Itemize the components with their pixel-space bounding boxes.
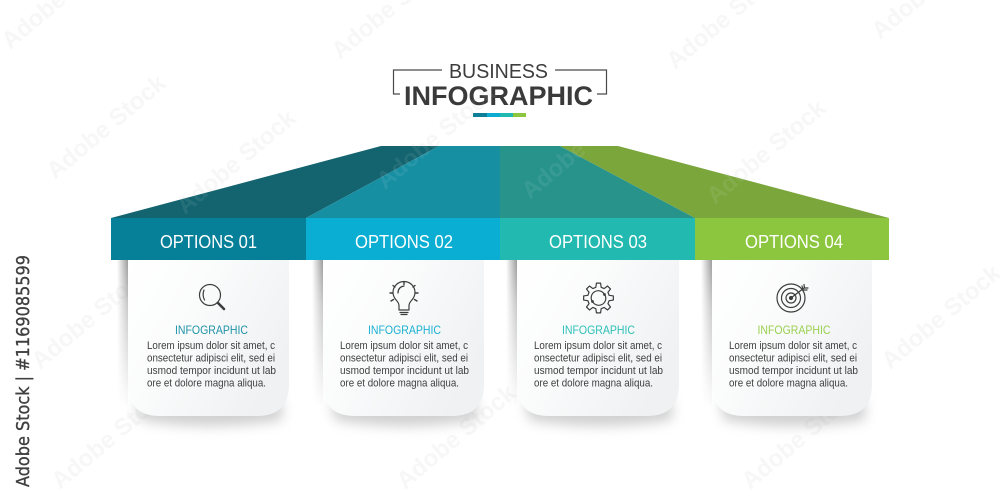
- title: [394, 61, 606, 117]
- roof watermark overlay: Adobe Stock: [702, 94, 832, 210]
- option 3 header: OPTIONS 03: [549, 232, 647, 252]
- left shade: [313, 260, 323, 393]
- watermark pattern: Adobe Stock: [172, 104, 302, 220]
- option 3 header: [500, 218, 695, 260]
- roof segment 4: [560, 146, 889, 218]
- card text: Lorem ipsum dolor sit amet, c: [534, 340, 662, 352]
- panel: option 4 card: [701, 260, 872, 426]
- stock credit vertical text: Adobe Stock | #1169085599: [13, 255, 34, 487]
- card text: Lorem ipsum dolor sit amet, c: [729, 340, 857, 352]
- card text: usmod tempor incidunt ut lab: [147, 365, 276, 377]
- card text: onsectetur adipisci elit, sed ei: [729, 352, 857, 364]
- watermark pattern: Adobe Stock: [702, 94, 832, 210]
- option 2 header: [306, 218, 500, 260]
- card text: ore et dolore magna aliqua.: [147, 378, 266, 390]
- roof watermark overlay: [172, 79, 832, 220]
- card shadow: [525, 400, 672, 426]
- card text: [729, 340, 858, 390]
- left shade: [702, 260, 712, 393]
- watermark pattern: Adobe Stock: [42, 69, 172, 185]
- watermark pattern: Adobe Stock: [27, 259, 157, 375]
- title colour bar: [473, 113, 526, 117]
- card text: Lorem ipsum dolor sit amet, c: [340, 340, 468, 352]
- watermark pattern: Adobe Stock: [392, 379, 522, 495]
- card text: onsectetur adipisci elit, sed ei: [534, 352, 662, 364]
- card body: [712, 260, 872, 416]
- roof watermark overlay: Adobe Stock: [517, 89, 647, 205]
- watermark pattern: Adobe Stock: [737, 379, 867, 495]
- roof watermark overlay: Adobe Stock: [172, 104, 302, 220]
- option 4 header: [695, 218, 889, 260]
- card text: usmod tempor incidunt ut lab: [729, 365, 858, 377]
- card heading: INFOGRAPHIC: [562, 323, 635, 337]
- card heading: INFOGRAPHIC: [175, 323, 248, 337]
- left shade: [118, 260, 128, 393]
- card shadow: [720, 400, 865, 426]
- roof watermark overlay: Adobe Stock: [372, 79, 502, 195]
- icon: magnifier: [200, 284, 224, 309]
- title line 1: BUSINESS: [449, 61, 548, 83]
- option 4 header: OPTIONS 04: [745, 232, 843, 252]
- card shadow: [331, 400, 477, 426]
- icon: target: [777, 284, 808, 312]
- option 1 header: OPTIONS 01: [160, 232, 257, 252]
- left shade: [507, 260, 517, 393]
- watermark pattern: Adobe Stock: [372, 79, 502, 195]
- title frame: [394, 70, 606, 94]
- card text: usmod tempor incidunt ut lab: [534, 365, 663, 377]
- panel: option 3 card: [506, 260, 679, 426]
- card text: [147, 340, 276, 390]
- card text: Lorem ipsum dolor sit amet, c: [147, 340, 275, 352]
- card heading: INFOGRAPHIC: [758, 323, 831, 337]
- card body: [128, 260, 289, 416]
- roof segment 2: [306, 146, 500, 218]
- card shadow: [136, 400, 282, 426]
- card text: ore et dolore magna aliqua.: [729, 378, 848, 390]
- roof segment 1: [111, 146, 439, 218]
- option header bars: [111, 218, 889, 260]
- panel: option 2 card: [312, 260, 484, 426]
- roof: [111, 146, 889, 218]
- card text: onsectetur adipisci elit, sed ei: [147, 352, 275, 364]
- card body: [323, 260, 484, 416]
- option 1 header: [111, 218, 306, 260]
- icon: gear: [584, 283, 613, 313]
- roof segment 3: [500, 146, 695, 218]
- watermark pattern: Adobe Stock: [47, 379, 177, 495]
- card text: ore et dolore magna aliqua.: [534, 378, 653, 390]
- card body: [517, 260, 679, 416]
- card text: [340, 340, 469, 390]
- card text: [534, 340, 663, 390]
- title line 2: INFOGRAPHIC: [404, 81, 593, 111]
- card text: ore et dolore magna aliqua.: [340, 378, 459, 390]
- option 2 header: OPTIONS 02: [355, 232, 453, 252]
- panel: option 1 card: [117, 260, 289, 426]
- card heading: INFOGRAPHIC: [368, 323, 441, 337]
- card text: onsectetur adipisci elit, sed ei: [340, 352, 468, 364]
- card text: usmod tempor incidunt ut lab: [340, 365, 469, 377]
- icon: light bulb: [390, 282, 418, 314]
